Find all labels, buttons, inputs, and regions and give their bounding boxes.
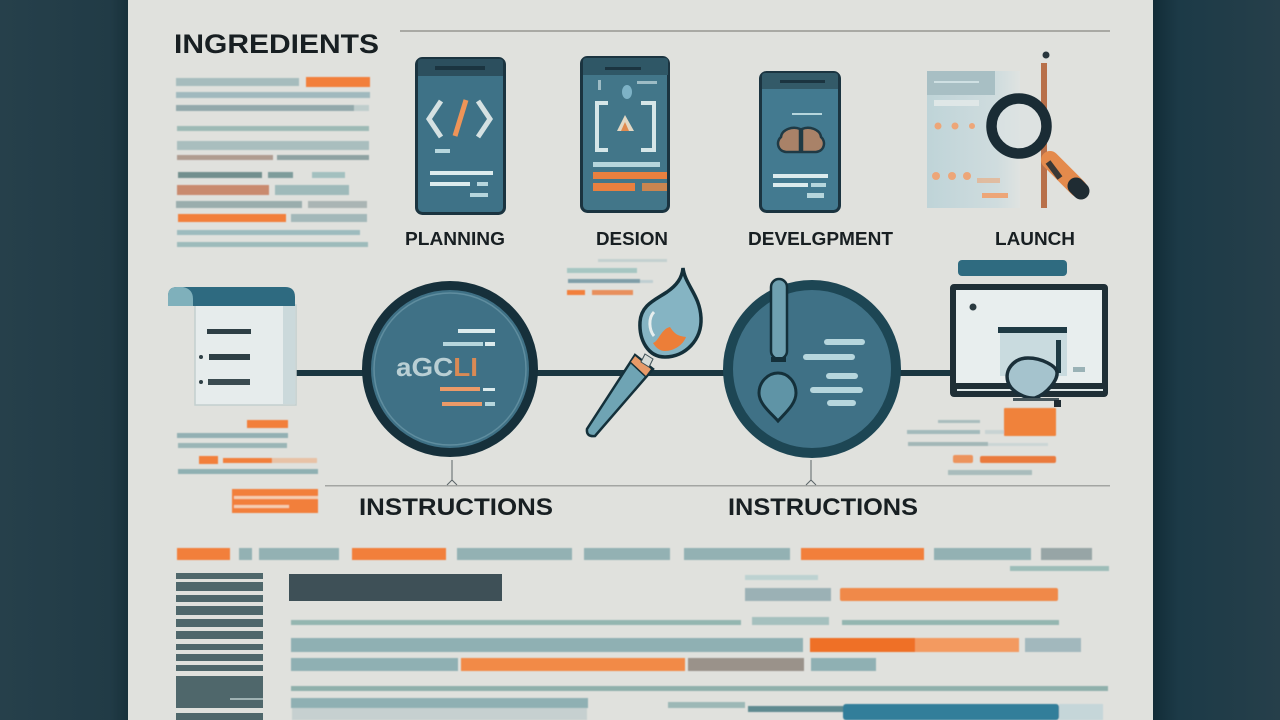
text block: below document: [177, 420, 318, 513]
label: design: DESION: [596, 228, 668, 249]
icon: launch magnifier card: [927, 52, 1081, 208]
table header row: [177, 548, 1092, 560]
table body rows: [291, 566, 1109, 720]
panel: ingredients text block: [176, 77, 370, 247]
label: planning: PLANNING: [405, 228, 505, 249]
text block: above brush: [567, 259, 667, 295]
icon: document: [168, 287, 296, 405]
icon: circle code: aGCLI: [396, 352, 478, 382]
heading: instructions left: INSTRUCTIONS: [359, 494, 553, 521]
sidebar stack: [176, 573, 263, 720]
label: development: DEVELGPMENT: [748, 228, 894, 249]
icon: circle code: [366, 286, 534, 452]
icon: monitor: [951, 260, 1107, 407]
text block: below monitor: [907, 408, 1056, 475]
step labels: [405, 228, 1075, 249]
divider with ticks: [325, 460, 1110, 486]
icon: phone planning: [416, 58, 504, 214]
icon: circle brush: [728, 279, 896, 453]
label: launch: LAUNCH: [995, 228, 1075, 249]
icon: phone design: [582, 58, 668, 212]
icon: phone development: [760, 72, 840, 212]
connector line: [296, 370, 952, 376]
icon: paint brush: [587, 268, 701, 436]
heading: ingredients: INGREDIENTS: [174, 29, 379, 59]
heading: instructions right: INSTRUCTIONS: [728, 494, 918, 521]
title block: [289, 574, 502, 601]
